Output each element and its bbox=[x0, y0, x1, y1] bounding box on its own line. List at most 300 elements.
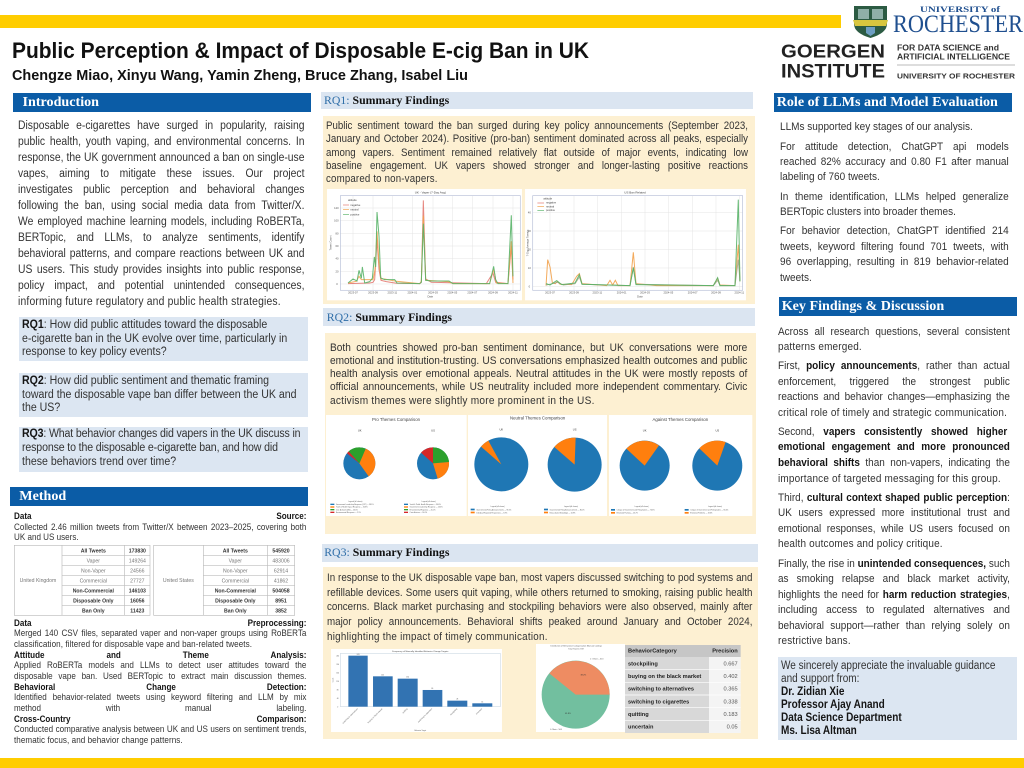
chart: behavior change frequency bars: 134 bbox=[406, 677, 409, 679]
text: introduction body bbox=[18, 120, 304, 308]
chart: behavior change frequency bars bbox=[331, 649, 502, 732]
chart: behavior categorization pie bbox=[536, 644, 625, 732]
table: tweet counts by country: Disposable Only bbox=[215, 598, 256, 604]
table: precision by behavior category: BehaviorCategory bbox=[628, 649, 678, 655]
text: RQ3 findings: concerns. Black market purchasing and stockpiling behaviors were also observed, mainly after bbox=[327, 601, 753, 613]
callout: research question 1: response to key policy events? bbox=[22, 346, 167, 358]
callout: research question 1 bbox=[19, 317, 308, 361]
table: precision by behavior category: 0.183 bbox=[724, 712, 738, 718]
chart: behavior change frequency bars: Count bbox=[331, 677, 334, 682]
chart: UK vaper sentiment line chart: 2024-03 bbox=[428, 291, 439, 295]
legend: pro themes: Government Leadership Response — 23.6% bbox=[410, 506, 443, 509]
text: introduction body: informing future regulatory and public health strategies. bbox=[18, 296, 281, 308]
chart: US ban related sentiment line chart: 2024-09 bbox=[711, 291, 721, 295]
text: method steps: disposable vape ban. Used BERTopic to extract main discussion themes. bbox=[14, 671, 306, 682]
table: precision by behavior category: stockpiling bbox=[628, 661, 658, 667]
legend: neutral themes bbox=[471, 506, 585, 514]
Goergen Institute wordmark: UNIVERSITY OF ROCHESTER bbox=[897, 72, 1016, 80]
text: RQ3 findings: major policy announcements. Behavioral shifts peaked around January and October 2024, bbox=[327, 616, 753, 628]
text: acknowledgements: Professor Ajay Anand bbox=[781, 699, 885, 711]
text: unintended consequences finding: including access to regulated alternatives and bbox=[778, 604, 1010, 616]
text: behavior detection: 96 overlapping, resulting in 819 behavior-related bbox=[780, 256, 1009, 268]
pie: pro US bbox=[417, 447, 449, 479]
table: tweet counts by country: Non-Vaper bbox=[223, 568, 248, 574]
text: RQ1 findings bbox=[326, 120, 748, 185]
panel background: RQ2 bbox=[325, 333, 756, 534]
text: method steps: method with manual labeling. bbox=[14, 703, 306, 714]
chart: UK vaper sentiment line chart: positive bbox=[351, 213, 360, 217]
chart: behavior change frequency bars: switching to alternatives bbox=[341, 708, 358, 725]
pie: pro UK bbox=[343, 447, 375, 479]
icon: university shield bbox=[853, 6, 888, 38]
panel: method bbox=[10, 487, 308, 746]
text: acknowledgements: Data Science Department bbox=[781, 712, 902, 724]
chart: pro themes comparison pies: Pro Themes Comparison bbox=[372, 417, 421, 422]
panel: RQ1 findings bbox=[321, 92, 755, 304]
table: tweet counts by country: Commercial bbox=[222, 578, 249, 584]
text: unintended consequences finding: Finally, the rise in unintended consequences, such bbox=[778, 558, 1010, 570]
text: attitude detection: For attitude detection, ChatGPT api models bbox=[780, 141, 1009, 153]
panel: key findings and discussion bbox=[778, 297, 1017, 647]
text: RQ2 findings: health analysis over emotional appeals. Neutral attitudes in the UK were mostly reposts of bbox=[330, 368, 747, 380]
text: cultural context finding: health outcomes and policy critique. bbox=[778, 538, 943, 550]
text: unintended consequences finding: restrictive bans. bbox=[778, 635, 851, 647]
text: unintended consequences finding: highlights the need for harm reduction strategies, bbox=[778, 589, 1010, 601]
table: tweet counts by country: Non-Commercial bbox=[73, 588, 115, 594]
table: tweet counts by country bbox=[14, 545, 295, 616]
text: acknowledgements: Dr. Zidian Xie bbox=[781, 686, 845, 698]
pie: neutral UK bbox=[474, 437, 528, 491]
text: policy announcements finding: critical role of timely and strategic communication. bbox=[778, 407, 1007, 419]
table: precision by behavior category: uncertain bbox=[628, 725, 654, 731]
chart: behavior change frequency bars: 0 bbox=[337, 706, 338, 708]
chart: US ban related sentiment line chart: 2023-11 bbox=[593, 291, 603, 295]
text: vapers finding: emotional engagement and more pronounced bbox=[778, 441, 1010, 453]
chart: UK vaper sentiment line chart: UK - Vaper (7-Day Avg) bbox=[415, 191, 446, 195]
chart: UK vaper sentiment line chart: negative bbox=[351, 203, 361, 207]
pie: against UK bbox=[620, 441, 670, 491]
text: method steps: Applied RoBERTa models and LLMs to detect user attitudes toward the bbox=[14, 660, 306, 671]
text: consistent patterns: patterns emerged. bbox=[778, 341, 862, 353]
chart: behavior change frequency bars: stockpiling bbox=[449, 708, 458, 716]
chart: behavior change frequency bars: 80 bbox=[431, 688, 433, 690]
chart: UK vaper sentiment line chart: 2023-07 bbox=[348, 291, 359, 295]
legend: pro themes: Government Leadership Response (2,37) — 38.1% bbox=[336, 503, 374, 506]
text: introduction body: We employed machine learning models, including RoBERTa, bbox=[18, 216, 304, 228]
chart: UK vaper sentiment line chart: 2023-11 bbox=[388, 291, 398, 295]
text: method steps: Merged 140 CSV files, separated vaper and non-vaper groups using RoBERTa bbox=[14, 628, 306, 639]
text: method steps: Cross-Country Comparison: bbox=[14, 714, 306, 725]
chart: pro themes comparison pies bbox=[326, 415, 467, 516]
table: tweet counts by country: 146103 bbox=[129, 588, 146, 594]
text: attitude detection bbox=[780, 141, 1009, 183]
text: RQ1 findings: among vapers. Sentiment remained relatively flat outside of major events, indicating low bbox=[326, 147, 748, 159]
chart: US ban related sentiment line chart: 0 bbox=[529, 285, 531, 289]
text: policy announcements finding: enforcement, triggered the strongest public bbox=[778, 376, 1010, 388]
pie: neutral US bbox=[548, 438, 602, 492]
legend: pro themes: Youth & Health Impact Response — 32.8% bbox=[336, 506, 368, 509]
chart: neutral themes comparison pies: Neutral Themes Comparison bbox=[510, 416, 566, 421]
chart: US ban related sentiment line chart: 2023-07 bbox=[545, 291, 555, 295]
text: introduction body: BERTopic, and LLMs, to analyze sentiments, identify bbox=[18, 232, 304, 244]
text: RQ3 findings: refillable devices. Some users quit vaping, while others returned to smoking, raising public health bbox=[327, 587, 753, 599]
callout: research question 2: toward the disposable vape ban differ between the UK and bbox=[22, 389, 296, 401]
legend: pro themes: Civic Activism (480) — 26.5% bbox=[336, 508, 358, 511]
text: introduction body: vapes, aiming to mitigate these issues. Our project bbox=[18, 168, 304, 180]
chart: US ban related sentiment line chart: 2024-03 bbox=[640, 291, 650, 295]
text: introduction body: response, the UK government announced a ban on single-use bbox=[18, 152, 304, 164]
text: cultural context finding: emotional responses, while US users focused on bbox=[778, 523, 1010, 535]
chart: US ban related sentiment line chart: 2024-07 bbox=[688, 291, 698, 295]
chart: behavior change frequency bars: 40 bbox=[336, 698, 338, 700]
chart: US ban related sentiment line chart: Date bbox=[637, 295, 643, 299]
text: policy announcements finding bbox=[778, 360, 1010, 419]
table: tweet counts by country: United States bbox=[163, 578, 194, 584]
chart: behavior change frequency bars: buying on black market bbox=[367, 707, 383, 724]
heading: role of LLMs and model evaluation: Role of LLMs and Model Evaluation bbox=[777, 94, 998, 110]
table: tweet counts by country: Ban Only bbox=[82, 608, 105, 614]
chart: UK vaper sentiment line chart: 40 bbox=[336, 257, 339, 261]
legend: neutral themes: Governmental Policy Announcements — 93.1% bbox=[476, 508, 512, 511]
callout: research question 3: RQ3: What behavior changes did vapers in the UK discuss in bbox=[22, 428, 300, 440]
chart: US ban related sentiment line chart: 7-Day Average Tweets bbox=[526, 229, 530, 257]
text: method steps: Attitude and Theme Analysis: bbox=[14, 650, 306, 661]
Goergen Institute wordmark: GOERGEN bbox=[781, 40, 885, 62]
legend: against themes bbox=[611, 506, 729, 515]
chart: behavior change frequency bars: 120 bbox=[336, 681, 339, 683]
table: tweet counts by country: 8951 bbox=[275, 598, 287, 604]
text: cultural context finding bbox=[778, 492, 1010, 550]
heading: RQ3 summary findings: RQ3: Summary Findings bbox=[324, 545, 449, 559]
legend: pro themes: Civic Activism — 14.6% bbox=[410, 511, 428, 514]
legend: pro themes: Environmental Response — 25.1% bbox=[410, 508, 436, 511]
text: data source: Collected 2.46 million tweets from Twitter/X between 2023–2025, covering both bbox=[14, 522, 306, 533]
text: method steps: Conducted comparative analysis between UK and US users on sentiment trends, bbox=[14, 724, 306, 735]
table: tweet counts by country: 3852 bbox=[275, 608, 287, 614]
table: precision by behavior category: 0.365 bbox=[724, 687, 738, 693]
chart: UK vaper sentiment line chart: Date bbox=[428, 295, 434, 299]
chart: behavior change frequency bars: 16 bbox=[481, 701, 483, 703]
table: tweet counts by country: Ban Only bbox=[224, 608, 247, 614]
heading: RQ2 summary findings bbox=[323, 308, 755, 326]
text: introduction body: investigates public perception and behavioral changes bbox=[18, 184, 304, 196]
chart: US ban related sentiment line chart: 2024-01 bbox=[617, 291, 627, 295]
heading: RQ1 summary findings bbox=[321, 92, 753, 109]
chart: US ban related sentiment line chart: 30 bbox=[528, 229, 531, 233]
text: consistent patterns: Across all research questions, several consistent bbox=[778, 326, 1010, 338]
chart: UK vaper sentiment line chart: 80 bbox=[336, 232, 339, 236]
chart: UK vaper sentiment line chart: neutral bbox=[351, 208, 359, 212]
table: tweet counts by country: Vaper bbox=[87, 558, 100, 564]
chart: behavior change frequency bars: 240 bbox=[336, 656, 339, 658]
text: introduction body: behavioral patterns, and compare reactions between UK and bbox=[18, 248, 304, 260]
legend: neutral themes: News-related Knowledge — 13.9% bbox=[550, 511, 576, 514]
chart: UK vaper sentiment line chart bbox=[327, 189, 522, 300]
table: tweet counts by country: Non-Commercial bbox=[215, 588, 257, 594]
heading: RQ3 summary findings bbox=[322, 544, 758, 562]
text: data source bbox=[14, 511, 306, 543]
text: data source: Data Source: bbox=[14, 511, 306, 522]
text: introduction body: US users. This study provides insights into public response, bbox=[18, 264, 304, 276]
chart: behavior categorization pie: 1: Others - 313 bbox=[590, 658, 604, 661]
text: theme identification: BERTopic clusters into broader themes. bbox=[780, 206, 956, 218]
table: tweet counts by country: 504058 bbox=[272, 588, 290, 594]
heading: key findings and discussion: Key Findings & Discussion bbox=[782, 298, 944, 314]
callout: research question 2: RQ2: How did public sentiment and thematic framing bbox=[22, 375, 269, 387]
text: RQ2 findings: Both countries showed pro-ban sentiment dominance, but UK conversations were more bbox=[330, 342, 747, 354]
chart: behavior change frequency bars: 200 bbox=[336, 664, 339, 666]
text: theme identification bbox=[780, 191, 1009, 218]
pie: against US bbox=[693, 441, 743, 491]
legend: against themes: Emotional Framing — 23.7% bbox=[617, 512, 639, 515]
text: method steps: thematic focus, and behavior change patterns. bbox=[14, 735, 182, 746]
legend: against themes: Legend (all shown) bbox=[635, 506, 649, 508]
logo: University of Rochester and Goergen Institute bbox=[781, 4, 1023, 82]
chart: behavior categorization pie: Total Tweets: 819 bbox=[568, 648, 585, 651]
chart: UK vaper sentiment line chart: 20 bbox=[336, 270, 339, 274]
chart: UK vaper sentiment line chart: 2024-11 bbox=[508, 291, 519, 295]
chart: US ban related sentiment line chart: US Ban Related bbox=[624, 191, 646, 195]
callout: research question 1: e-cigarette ban in the UK evolve over time, particularly in bbox=[22, 333, 287, 345]
chart: behavior change frequency bars: Frequency of Manually Identified Behavior Change Targets bbox=[392, 650, 448, 653]
table: precision by behavior category: Precision bbox=[712, 649, 738, 655]
text: acknowledgements: and support from: bbox=[781, 673, 860, 685]
text: method steps bbox=[14, 618, 306, 746]
text: method steps: Identified behavior-related tweets using keyword filtering and LLM by mix bbox=[14, 692, 306, 703]
authors: Chengze Miao, Xinyu Wang, Yamin Zheng, Bruce Zhang, Isabel Liu bbox=[12, 68, 468, 84]
top yellow bar bbox=[0, 15, 841, 28]
chart: behavior categorization pie: 38.2% bbox=[580, 675, 586, 677]
text: method steps: Data Preprocessing: bbox=[14, 618, 306, 629]
callout: research question 1: RQ1: How did public attitudes toward the disposable bbox=[22, 319, 267, 331]
text: RQ3 findings bbox=[327, 572, 753, 643]
chart: US ban related sentiment line chart: 10 bbox=[528, 266, 531, 270]
table: tweet counts by country: 62914 bbox=[274, 568, 288, 574]
heading: method bbox=[10, 487, 308, 506]
chart: UK vaper sentiment line chart: 2024-05 bbox=[448, 291, 458, 295]
table: precision by behavior category bbox=[625, 645, 741, 733]
text: unintended consequences finding bbox=[778, 558, 1010, 647]
legend: pro themes: Environmental Response — 2.1% bbox=[336, 511, 361, 514]
text: cultural context finding: UK users expressed more institutional trust and bbox=[778, 507, 1010, 519]
Goergen Institute wordmark: INSTITUTE bbox=[781, 60, 885, 82]
chart: UK vaper sentiment line chart: Tweet Count bbox=[329, 236, 333, 251]
bottom yellow bar bbox=[0, 758, 1024, 768]
heading: RQ1 summary findings: RQ1: Summary Findings bbox=[324, 93, 449, 107]
text: unintended consequences finding: behavioral support—rather than relying solely on bbox=[778, 620, 1010, 632]
panel background: RQ3 bbox=[323, 567, 758, 739]
text: data source: UK and US users. bbox=[14, 532, 78, 543]
chart: neutral themes comparison pies bbox=[468, 415, 607, 516]
table: tweet counts by country: Non-Vaper bbox=[81, 568, 106, 574]
text: behavior detection: tweets. bbox=[780, 272, 812, 284]
text: vapers finding: importance of targeted messaging for this group. bbox=[778, 473, 1001, 485]
table: tweet counts by country: Vaper bbox=[229, 558, 242, 564]
text: unintended consequences finding: as smoking relapse and black market activity, bbox=[778, 573, 1010, 585]
text: RQ3 findings: In response to the UK disposable vape ban, most vapers discussed switching to pod systems and bbox=[327, 572, 753, 584]
chart: UK vaper sentiment line chart: 100 bbox=[334, 219, 339, 223]
panel: acknowledgements bbox=[778, 657, 1017, 740]
chart: US ban related sentiment line chart: 20 bbox=[528, 248, 531, 252]
legend: neutral themes: Legend (all shown) bbox=[491, 506, 505, 508]
table: tweet counts by country: 27727 bbox=[130, 578, 145, 584]
text: introduction body: following the ban, using social media data from Twitter/X. bbox=[18, 200, 304, 212]
text: acknowledgements bbox=[781, 660, 996, 737]
table: tweet counts by country: 173830 bbox=[129, 548, 146, 554]
chart: behavior change frequency bars: switching to cigarettes bbox=[417, 708, 433, 723]
heading: key findings and discussion bbox=[779, 297, 1017, 316]
callout: research question 3 bbox=[19, 427, 308, 472]
text: method steps: Behavioral Change Detection: bbox=[14, 682, 306, 693]
chart: UK vaper sentiment line chart: 2023-09 bbox=[368, 291, 379, 295]
chart: behavior change frequency bars: uncertain bbox=[475, 708, 483, 715]
legend: pro themes bbox=[330, 501, 443, 514]
text: RQ2 findings: official announcements, while US neutrality included more independent commentary. Civic bbox=[330, 381, 747, 393]
text: RQ2 findings: emotional and institution-trusting. US conversations emphasized health outcomes and public bbox=[330, 355, 747, 367]
chart: against themes comparison pies: Against Themes Comparison bbox=[653, 417, 709, 422]
chart: behavior change frequency bars: 243 bbox=[356, 654, 359, 656]
chart: US ban related sentiment line chart: positive bbox=[546, 208, 556, 212]
table: precision by behavior category: 0.338 bbox=[724, 699, 738, 705]
chart: US ban related sentiment line chart: neutral bbox=[546, 205, 555, 209]
chart: against themes comparison pies: UK bbox=[643, 429, 647, 433]
heading: RQ2 summary findings: RQ2: Summary Findings bbox=[327, 310, 452, 324]
chart: US ban related sentiment line chart bbox=[525, 189, 746, 300]
table: tweet counts by country: 11423 bbox=[130, 608, 144, 614]
chart: behavior change frequency bars: 145 bbox=[381, 674, 384, 676]
text: RQ1 findings: January and October 2024). Positive (pro-ban) sentiment dominated across all peaks, especially bbox=[326, 133, 748, 145]
text: introduction body: Disposable e-cigarettes have surged in popularity, raising bbox=[18, 120, 304, 132]
table: tweet counts by country: 149264 bbox=[129, 558, 146, 564]
legend: pro themes: Legend (all shown) bbox=[348, 501, 363, 503]
text: introduction body: public health, youth vaping, and environmental concerns. In bbox=[18, 136, 304, 148]
text: attitude detection: reached 82% accuracy and 0.80 F1 after manual bbox=[780, 156, 1009, 168]
chart: UK vaper sentiment line chart: 120 bbox=[334, 206, 339, 210]
chart: US ban related sentiment line chart: 2023-09 bbox=[569, 291, 579, 295]
chart: neutral themes comparison pies: UK bbox=[499, 428, 503, 432]
callout: research question 3: these behaviors trend over time? bbox=[22, 456, 176, 468]
text: vapers finding bbox=[778, 426, 1010, 485]
Goergen Institute wordmark: FOR DATA SCIENCE and bbox=[897, 44, 999, 52]
panel: role of LLMs bbox=[774, 93, 1012, 284]
text: vapers finding: behavioral shifts than non-vapers, indicating the bbox=[778, 457, 1010, 469]
table: tweet counts by country: 483006 bbox=[272, 558, 290, 564]
text: RQ1 findings: compared to non-vapers. bbox=[326, 173, 438, 185]
chart: pro themes comparison pies: UK bbox=[358, 429, 362, 433]
table: precision by behavior category: switching to cigarettes bbox=[628, 699, 689, 705]
panel: RQ2 findings bbox=[323, 308, 756, 534]
legend: neutral themes: Governmental Policy Announcements — 86.1% bbox=[550, 508, 585, 511]
callout: research question 2 bbox=[19, 373, 308, 417]
callout: research question 2: the US? bbox=[22, 402, 60, 414]
chart: behavior change frequency bars: Behavior Target bbox=[414, 729, 426, 732]
chart: behavior categorization pie: 0: Main - 506 bbox=[550, 729, 563, 731]
chart: behavior change frequency bars: quitting bbox=[401, 708, 408, 714]
panel background: RQ1 bbox=[323, 116, 755, 304]
legend: against themes: Emotional Problems — 19.6% bbox=[691, 512, 713, 515]
chart: against themes comparison pies: US bbox=[716, 429, 720, 433]
chart: US ban related sentiment line chart: negative bbox=[546, 201, 557, 205]
legend: against themes: Legend (all shown) bbox=[708, 506, 723, 508]
text: policy announcements finding: reactions and behavior changes—emphasizing the bbox=[778, 391, 1010, 403]
table: precision by behavior category: 0.402 bbox=[724, 674, 738, 680]
chart: behavior change frequency bars: 160 bbox=[336, 673, 339, 675]
panel: introduction bbox=[13, 93, 311, 472]
text: vapers finding: Second, vapers consistently showed higher bbox=[778, 426, 1007, 438]
chart: neutral themes comparison pies: US bbox=[573, 428, 577, 432]
panel: RQ3 findings bbox=[322, 544, 758, 739]
legend: neutral themes: Individual Reposted Perspectives — 6.9% bbox=[476, 511, 508, 514]
table: tweet counts by country: 24566 bbox=[130, 568, 145, 574]
table: precision by behavior category: 0.05 bbox=[727, 725, 738, 731]
text: RQ2 findings: activism themes were slightly more prominent in the US. bbox=[330, 394, 595, 406]
chart: behavior change frequency bars: 80 bbox=[336, 690, 338, 692]
chart: UK vaper sentiment line chart: attitude bbox=[348, 198, 358, 202]
text: LLM stages: LLMs supported key stages of our analysis. bbox=[780, 121, 973, 133]
Goergen Institute wordmark: ARTIFICIAL INTELLIGENCE bbox=[897, 52, 1011, 62]
table: tweet counts by country: 545920 bbox=[272, 548, 290, 554]
text: theme identification: In theme identification, LLMs helped generalize bbox=[780, 191, 1009, 203]
legend: neutral themes: Legend (all shown) bbox=[564, 506, 578, 508]
text: introduction body: policy impact, and potential unintended consequences, bbox=[18, 280, 304, 292]
table: precision by behavior category: buying on the black market bbox=[628, 674, 701, 680]
table: tweet counts by country: Commercial bbox=[80, 578, 107, 584]
table: tweet counts by country: All Tweets bbox=[81, 548, 106, 554]
text: RQ2 findings bbox=[330, 342, 748, 406]
text: RQ3 findings: highlighting the impact of timely communication. bbox=[327, 631, 548, 643]
chart: UK vaper sentiment line chart: 60 bbox=[336, 244, 339, 248]
text: attitude detection: labeling of 760 tweets. bbox=[780, 171, 880, 183]
text: method steps: classification, filtered for disposable vape and ban-related tweets. bbox=[14, 639, 252, 650]
chart: UK vaper sentiment line chart: 2024-09 bbox=[488, 291, 499, 295]
table: precision by behavior category: 0.667 bbox=[724, 661, 738, 667]
chart: pro themes comparison pies: US bbox=[431, 429, 435, 433]
chart: US ban related sentiment line chart: 2024-11 bbox=[735, 291, 745, 295]
chart: UK vaper sentiment line chart: 2024-01 bbox=[408, 291, 418, 295]
chart: against themes comparison pies bbox=[609, 415, 752, 516]
heading: method: Method bbox=[19, 488, 66, 504]
text: acknowledgements: Ms. Lisa Altman bbox=[781, 725, 857, 737]
chart: behavior categorization pie: Distribution of Behavioral Categorization (Manual Coding) bbox=[550, 645, 602, 648]
chart: US ban related sentiment line chart: attitude bbox=[543, 197, 553, 201]
text: policy announcements finding: First, policy announcements, rather than actual bbox=[778, 360, 1010, 372]
text: cultural context finding: Third, cultural context shaped public perception: bbox=[778, 492, 1010, 504]
university name: UNIVERSITY of bbox=[920, 4, 1000, 14]
text: RQ1 findings: baseline engagement. UK vapers showed stronger and longer-lasting positive reactions bbox=[326, 160, 748, 172]
table: tweet counts by country: United Kingdom bbox=[20, 578, 56, 584]
text: RQ1 findings: Public sentiment toward the ban surged during key policy announcements (September 2023, bbox=[326, 120, 748, 132]
legend: against themes: Critique of Government and Policymakers — 80.4% bbox=[691, 509, 729, 512]
heading: introduction bbox=[13, 93, 311, 112]
table: tweet counts by country: Disposable Only bbox=[73, 598, 114, 604]
chart: US ban related sentiment line chart: 2024-05 bbox=[663, 291, 674, 295]
table: tweet counts by country: 41862 bbox=[274, 578, 288, 584]
callout: research question 3: response to the disposable e-cigarette ban, and how did bbox=[22, 442, 278, 454]
chart: behavior change frequency bars: 28 bbox=[456, 699, 458, 701]
text: behavior detection bbox=[780, 225, 1009, 284]
table: tweet counts by country: 16056 bbox=[130, 598, 145, 604]
legend: pro themes: Legend (all shown) bbox=[422, 501, 436, 503]
legend: pro themes: Youth & Public Health Response — 36.6% bbox=[410, 503, 441, 506]
legend: against themes: Critique of Government and Policymakers — 76.3% bbox=[617, 509, 655, 512]
chart: US ban related sentiment line chart: 40 bbox=[528, 211, 531, 215]
text: behavior detection: tweets, keyword filtering found 701 tweets, with bbox=[780, 241, 1009, 253]
text: behavior detection: For behavior detection, ChatGPT identified 214 bbox=[780, 225, 1009, 237]
table: precision by behavior category: switching to alternatives bbox=[628, 687, 694, 693]
chart: UK vaper sentiment line chart: 0 bbox=[337, 282, 339, 286]
chart: behavior categorization pie: 61.8% bbox=[565, 713, 571, 715]
text: acknowledgements: We sincerely appreciate the invaluable guidance bbox=[781, 660, 996, 672]
